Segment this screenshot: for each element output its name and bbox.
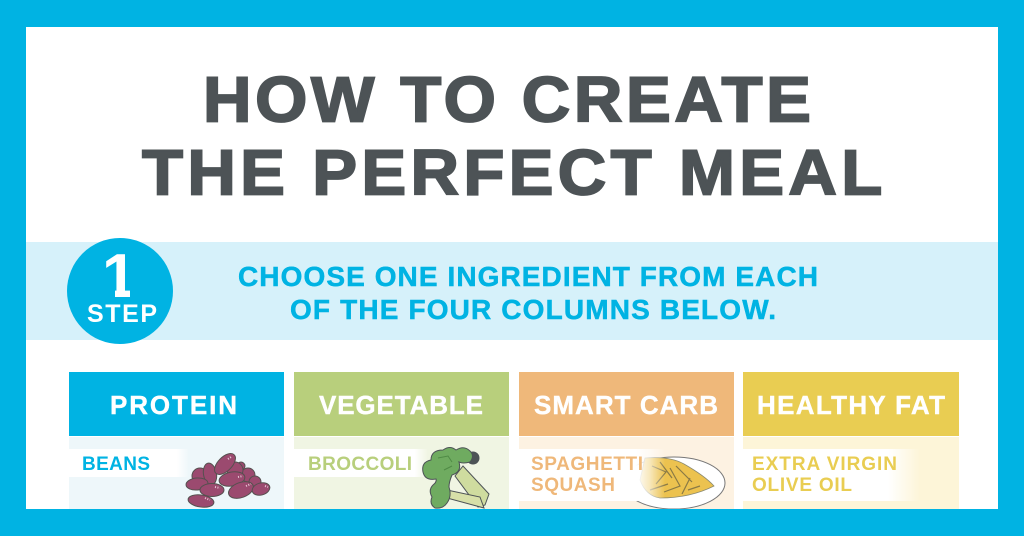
smart carb label [531,454,643,496]
icon: beans [186,450,271,509]
title: HOW TO CREATE [203,64,811,135]
step band [26,242,998,340]
step instruction text [238,261,818,325]
column: vegetable [294,372,509,509]
column: healthy fat: EXTRA VIRGIN [752,454,897,475]
column: smart carb: SMART CARB [534,390,718,420]
title [142,64,882,208]
vegetable header [294,372,509,436]
column: healthy fat: OLIVE OIL [752,475,852,496]
column: smart carb [519,372,734,509]
column: healthy fat: HEALTHY FAT [757,390,945,420]
column: protein [69,372,284,509]
title: THE PERFECT MEAL [142,137,882,208]
smart carb label: SPAGHETTI [531,454,643,475]
column: protein: BEANS [82,454,150,475]
column: vegetable: VEGETABLE [319,390,483,420]
column: vegetable: BROCCOLI [308,454,412,475]
icon: broccoli [423,448,489,508]
protein header [69,372,284,436]
smart carb header [519,372,734,436]
step badge: 1 [102,242,136,311]
column: healthy fat [743,372,959,509]
step instruction text: CHOOSE ONE INGREDIENT FROM EACH [238,261,818,292]
smart carb label: SQUASH [531,475,615,496]
bottom frame edge [0,509,1024,536]
healthy fat header [743,372,959,436]
step badge: STEP [87,300,157,328]
step instruction text: OF THE FOUR COLUMNS BELOW. [290,294,776,325]
icon: spaghetti squash plate [519,449,725,509]
column: protein: PROTEIN [110,390,237,420]
step badge [67,238,173,344]
